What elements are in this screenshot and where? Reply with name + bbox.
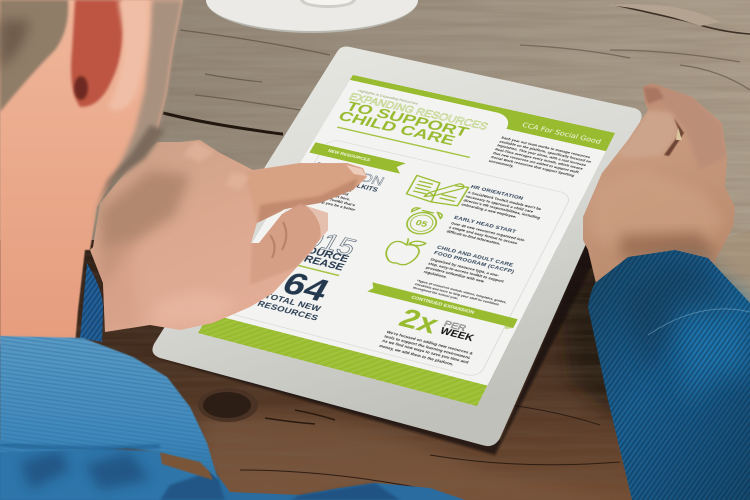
- white heading panel: [335, 80, 513, 142]
- toolkit paragraph: From new Toolkits to: [310, 180, 352, 193]
- shirt cuff at left wrist: [80, 263, 103, 342]
- stubble beard: [92, 0, 183, 245]
- section: early head start: Over 40 new resources organized into: [450, 221, 525, 242]
- wood knot: [198, 388, 258, 422]
- title: TO SUPPORT: [343, 99, 471, 140]
- intro paragraph: [488, 136, 592, 178]
- expansion paragraph: money, we add them to the platform.: [379, 343, 455, 366]
- hair: [0, 0, 68, 112]
- section: early head start: difficult-to-find information.: [446, 229, 501, 246]
- intro paragraph: legislation. This year alone, with a real increase: [497, 144, 587, 167]
- expansion paragraph: [379, 330, 474, 366]
- title: EXPANDING RESOURCES: [347, 92, 490, 132]
- stat: 64 total new resources: [255, 265, 336, 323]
- section: HR orientation: [461, 185, 542, 220]
- ribbon: new resources: [310, 142, 406, 174]
- icon: alarm clock: 05: [394, 206, 407, 216]
- section: CACFP: providers unfamiliar with new: [425, 266, 485, 283]
- skin: [0, 0, 183, 345]
- tablet body: [152, 47, 642, 446]
- right shirt sleeve: [588, 250, 750, 500]
- thumb: [250, 204, 328, 285]
- intro paragraph: available on the platform, specifically focused on: [499, 140, 592, 164]
- icon: alarm clock: [394, 206, 444, 235]
- wood cracks: [163, 113, 283, 134]
- section: early head start: EARLY HEAD START: [453, 215, 517, 235]
- eyebrow: Highlights in Expanding Resources: [357, 89, 419, 105]
- section: early head start: [446, 215, 525, 246]
- expansion paragraph: As we find new ways to save you time and: [381, 339, 469, 365]
- stat: 64 total new resources: 64: [276, 265, 336, 308]
- stat: 2015 resource increase: RESOURCE: [282, 239, 351, 264]
- title rule: [337, 126, 470, 158]
- lower shirt: [0, 440, 465, 500]
- fingernail: [346, 165, 366, 176]
- stat: 2x per week: PER: [442, 319, 468, 333]
- stat: new toolkits: TOOLKITS: [340, 179, 379, 193]
- right hand: [583, 83, 735, 282]
- icon: open book with pencil: [406, 174, 470, 206]
- tablet shadow: [150, 120, 640, 455]
- ribbon: continued expansion: [367, 282, 518, 330]
- stat: 2015 resource increase: 2015: [284, 221, 361, 261]
- rounded content panel: [225, 138, 573, 378]
- section: HR orientation: onboarding a new employee.: [461, 202, 518, 219]
- stat: 2x per week: 2x: [394, 303, 444, 340]
- toolkit paragraph: interactive tools and: [308, 184, 349, 196]
- back of hand shadow: [100, 170, 190, 290]
- section: CACFP: stop, easy-to-access toolkit to support: [427, 261, 505, 283]
- footer band: [198, 314, 487, 406]
- expansion paragraph: We're focused on adding new resources &: [386, 330, 474, 355]
- footnote: checklists and more to help your staff be confident: [414, 283, 499, 306]
- title: CHILD CARE: [335, 109, 458, 149]
- stat: 2x per week: [394, 303, 475, 344]
- intro paragraph: uncommonly.: [488, 159, 515, 168]
- ear: [71, 0, 123, 107]
- left hand pointing at screen: [90, 140, 367, 332]
- section: early head start: a simple and easy format to access: [448, 225, 518, 245]
- thumb knuckle: [615, 110, 678, 158]
- toolkit paragraph: [301, 180, 356, 212]
- stat: new toolkits: ADDITION: [309, 159, 387, 188]
- toolkit paragraph: more, keep. Start here.: [305, 188, 351, 201]
- intro paragraph: Each year our team works to manage resources: [501, 136, 591, 159]
- section: HR orientation: HR ORIENTATION: [470, 185, 524, 201]
- finger: [245, 163, 367, 223]
- intro paragraph: Social Work resources that support Spotting: [490, 155, 575, 177]
- intro paragraph: Real-Time averages every month, which means: [494, 147, 584, 171]
- toolkit paragraph: Here's a new Toolkit that's: [303, 191, 356, 207]
- stat rule: [280, 260, 339, 276]
- header band: [343, 75, 615, 151]
- collar: [0, 336, 218, 480]
- title: [335, 92, 490, 149]
- section: HR orientation: necessary to approach a child care: [465, 194, 534, 214]
- stat: 2x per week: WEEK: [438, 327, 475, 344]
- section: HR orientation: A SocialWork ToolKit module won't be: [467, 190, 542, 211]
- stat: 64 total new resources: RESOURCES: [255, 300, 320, 323]
- icon: apple: [385, 238, 427, 266]
- ribbon: continued expansion: CONTINUED EXPANSION: [410, 295, 475, 315]
- man's head: [0, 0, 183, 345]
- intro paragraph: that new resources are added to support staff.: [492, 151, 580, 174]
- man's shirt and collar: [0, 336, 465, 500]
- footnote: throughout the school year.: [412, 286, 459, 300]
- stat: 64 total new resources: TOTAL NEW: [263, 292, 322, 314]
- section: CACFP: FOOD PROGRAM (CACFP): [433, 250, 515, 275]
- saucer and cup: [206, 0, 418, 33]
- section: CACFP: CHILD AND ADULT CARE: [436, 245, 514, 268]
- section: CACFP: Organized by resource type, a one-: [430, 257, 500, 277]
- footnote: *Types of resources include videos, templates, guides,: [416, 279, 507, 304]
- wood gap under collar: [160, 452, 213, 480]
- section: CACFP: [423, 245, 515, 283]
- section: CACFP: regulations.: [423, 270, 448, 279]
- infographic page on the tablet: [198, 75, 615, 406]
- ribbon: new resources: NEW RESOURCES: [327, 149, 371, 163]
- brand label: CCA For Social Good: [520, 121, 602, 146]
- toolkit paragraph: built to help you be a better: [301, 195, 356, 212]
- expansion paragraph: tools to support the learning environment.: [384, 334, 472, 360]
- section: HR orientation: director's HR responsibilities, including: [463, 198, 541, 220]
- knuckle highlights: [186, 143, 247, 186]
- stat: 2015 resource increase: INCREASE: [283, 249, 346, 273]
